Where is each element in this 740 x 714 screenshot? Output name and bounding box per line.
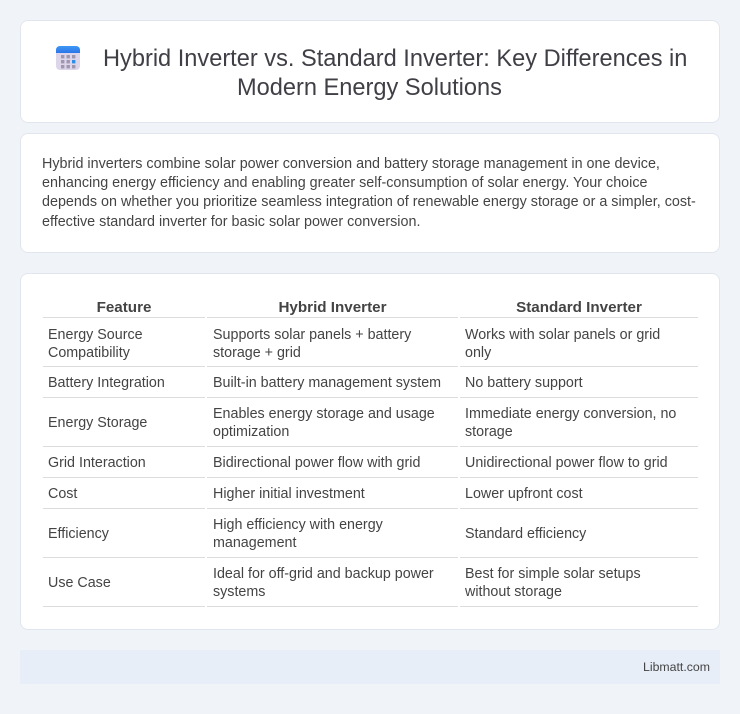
table rows: Bidirectional power flow with grid	[213, 455, 420, 471]
text block: intro	[42, 156, 696, 230]
table rows	[43, 317, 698, 607]
table rows: optimization	[213, 424, 289, 440]
table rows: Higher initial investment	[213, 486, 365, 502]
text block: intro: Hybrid inverters combine solar power conversion and battery storage management in one device,	[42, 156, 660, 172]
table rows: Supports solar panels + battery	[213, 327, 411, 343]
panel: intro text	[20, 133, 720, 253]
footer bar	[20, 650, 720, 684]
panel: comparison table	[20, 273, 720, 630]
table rows: Cost	[48, 486, 77, 502]
title: Hybrid Inverter vs. Standard Inverter: Key Differences in	[103, 46, 687, 72]
table rows: Energy Source	[48, 327, 143, 343]
table rows: storage + grid	[213, 345, 301, 361]
table rows: Compatibility	[48, 345, 130, 361]
table rows: High efficiency with energy	[213, 517, 383, 533]
table header	[97, 299, 642, 316]
title	[103, 46, 687, 101]
table rows: Battery Integration	[48, 375, 165, 391]
panel: title card	[20, 20, 720, 123]
table header: Standard Inverter	[516, 299, 642, 316]
table rows: storage	[465, 424, 513, 440]
table rows: Efficiency	[48, 526, 109, 542]
table rows: Energy Storage	[48, 415, 147, 431]
table rows: Immediate energy conversion, no	[465, 406, 676, 422]
table rows: Enables energy storage and usage	[213, 406, 435, 422]
table rows: Built-in battery management system	[213, 375, 441, 391]
table rows: No battery support	[465, 375, 583, 391]
table rows: Use Case	[48, 575, 111, 591]
icon: calendar	[56, 46, 80, 70]
text block: intro: depends on whether you prioritize seamless integration of renewable energy storage or a simpler, cost-	[42, 194, 696, 210]
text block: intro: effective standard inverter for basic solar power conversion.	[42, 214, 420, 230]
table rows: Ideal for off-grid and backup power	[213, 566, 434, 582]
table rows: systems	[213, 584, 265, 600]
table rows: Standard efficiency	[465, 526, 586, 542]
table rows: Unidirectional power flow to grid	[465, 455, 668, 471]
table header: Hybrid Inverter	[278, 299, 387, 316]
title: Modern Energy Solutions	[237, 75, 502, 101]
text block: intro: enhancing energy efficiency and enabling greater self-consumption of solar energy. Your choice	[42, 175, 647, 191]
table header: Feature	[97, 299, 151, 316]
table rows: Lower upfront cost	[465, 486, 583, 502]
table rows: Best for simple solar setups	[465, 566, 641, 582]
table rows: only	[465, 345, 491, 361]
footer text: Libmatt.com	[643, 660, 710, 674]
table rows: Grid Interaction	[48, 455, 146, 471]
table rows: management	[213, 535, 296, 551]
table rows: without storage	[465, 584, 562, 600]
table rows: Works with solar panels or grid	[465, 327, 660, 343]
